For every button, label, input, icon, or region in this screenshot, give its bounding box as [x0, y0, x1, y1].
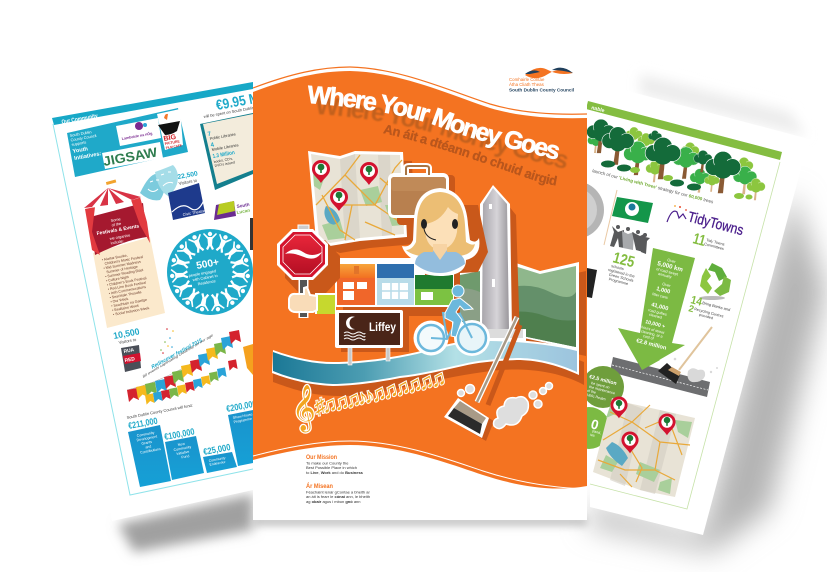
festivals list: • Summer Reading Blast	[105, 268, 144, 279]
bar: 211,000: Grants	[141, 440, 153, 446]
south dublin libraries logo: Lucan	[236, 208, 251, 215]
bar: 25,000: €25,000	[202, 442, 231, 457]
callout: 2.5 million: €2.5 million	[588, 374, 617, 387]
logo: Big Picture cafe	[157, 109, 183, 150]
circle: 500+ people engaged: with Cabinet in	[192, 273, 218, 282]
text: our mission	[306, 454, 364, 475]
icon: group of people	[610, 225, 650, 254]
circle: 500+ people engaged: people engaged	[188, 268, 216, 278]
logo: TidyTowns: TidyTowns	[686, 209, 745, 239]
road	[610, 357, 710, 397]
festivals list: • Seachtain Thusaila	[109, 290, 142, 300]
black tile	[587, 268, 597, 298]
panel: center cover page	[252, 66, 587, 520]
icon: dark tile	[250, 218, 253, 250]
bar: 211,000: Contributions	[140, 447, 161, 455]
bar: 100,000: Initiative	[176, 450, 190, 456]
south dublin libraries logo	[214, 201, 251, 220]
logo: Lamboirle: Lamboirle na nÓg	[121, 131, 153, 141]
stat: 125 schools	[605, 249, 637, 287]
text: ar misean: ag obair agus i mbun gnó ann	[306, 499, 360, 504]
big top tent: festivals and events: include:	[110, 238, 124, 245]
arrow: street cleaning stats: 1,000	[655, 286, 671, 296]
festivals list: Summer of Heritage	[106, 265, 138, 274]
circle: 500+ people engaged	[167, 229, 253, 315]
arrow: street cleaning stats: 41,000	[650, 302, 669, 312]
illustration: dust clouds	[458, 382, 552, 429]
bar: 211,000: Community	[136, 431, 155, 438]
forest of trees	[587, 119, 765, 200]
page shadows	[118, 74, 826, 552]
stat: bring banks: Bring Banks and	[702, 300, 731, 312]
bar: 211,000	[127, 416, 171, 487]
logo: South Dublin County Council: Comhairle Contae	[509, 77, 545, 82]
logo: South Dublin County Council: Átha Cliath Theas	[509, 82, 545, 87]
callout: green circle: ies	[590, 433, 595, 438]
illustration: music notes: ♯♫♫♫♪♪♫♫♫♫♫♫	[314, 371, 445, 417]
panel: left page "Our Community"	[27, 72, 264, 521]
bar: 100,000: New	[177, 442, 186, 447]
stat: 125 schools: Programme	[608, 277, 629, 286]
festivals list: • Bealtaine Week	[112, 304, 139, 312]
festivals list: • Our Week	[110, 297, 129, 304]
confetti	[160, 328, 174, 354]
arrow: street cleaning stats: Over	[662, 281, 672, 288]
youth initiatives panel	[67, 108, 188, 177]
stat: bring banks: provided	[699, 313, 713, 320]
Rua Red stat: 10,500	[112, 326, 140, 341]
funding intro: South Dublin County Council will fund:	[126, 403, 193, 420]
festival heading: Rediscover festival 2015	[151, 338, 203, 371]
stat: 125 schools: registered in the	[608, 268, 635, 279]
youth initiatives panel: County Council	[70, 133, 97, 142]
seal	[546, 181, 604, 239]
civic theatre stat: Civic Theatre	[182, 208, 205, 217]
arrow: street cleaning stats: cost of	[643, 334, 655, 341]
circle: 500+ people engaged: Residence	[197, 278, 216, 286]
strategy text: launch of our 'Living with Trees' strategy for our 60,000 trees	[592, 168, 715, 205]
bushes	[601, 160, 752, 200]
logo: Big Picture cafe: FILM CAFE	[165, 143, 182, 150]
text: ar misean: Féachaint lenár gContae a bheith ar	[306, 490, 370, 494]
header bar: Our Community	[61, 113, 99, 126]
festivals list: Children's Music Festival	[104, 255, 144, 266]
stat: 11 committees: Committees	[704, 242, 724, 251]
logo: JIGSAW: JIGSAW	[102, 144, 159, 169]
youth initiatives panel: South Dublin	[69, 129, 92, 138]
callout: 2.5 million: Public Realm	[584, 392, 606, 402]
bar chart: funding	[127, 398, 257, 487]
stat: 125 schools: Green Schools	[608, 273, 634, 283]
amount: 9.95 million: will be spent on South Dublin	[203, 105, 254, 119]
festivals list: • Children's Book Festival	[107, 276, 147, 287]
arrow: street cleaning stats: cleaning, at a	[641, 329, 664, 339]
logo: TidyTowns	[667, 205, 745, 239]
arrow: street cleaning stats: Over	[667, 257, 677, 264]
icon: recycling	[699, 263, 731, 300]
header bar: nable	[590, 105, 605, 114]
bar: 25,000: Endeavour	[209, 460, 227, 467]
bar: 100,000: Fund	[181, 454, 190, 459]
bar: 100,000: Community	[173, 445, 192, 452]
stat: 11 committees: Tidy Towns	[706, 238, 725, 247]
illustration: music notes	[292, 371, 445, 434]
stat: bring banks	[687, 294, 731, 323]
orange shape	[243, 344, 253, 375]
arrow: street cleaning stats: litter cans	[652, 292, 668, 300]
callout: 2.5 million: of the	[587, 389, 596, 395]
logo: Big Picture cafe: PICTURE	[164, 139, 181, 146]
bar: 25,000	[202, 442, 237, 473]
arrow tip over road	[630, 348, 660, 370]
civic theatre stat	[168, 170, 205, 220]
arrow: street cleaning stats: 10,000 +	[644, 319, 666, 330]
title: Where Your Money Goes	[308, 85, 560, 160]
civic theatre stat: Visitors to	[178, 178, 198, 186]
tent roof	[83, 188, 142, 208]
amount: 9.95 million	[203, 90, 264, 119]
illustration: Liffey sign	[335, 310, 409, 365]
bar: 100,000: €100,000	[163, 426, 195, 442]
arrow: street cleaning stats: annually	[658, 272, 672, 279]
callout: 2.5 million	[582, 366, 624, 408]
broom and dust	[658, 327, 718, 384]
logo: South Dublin County Council: South Dublin County Council	[509, 88, 574, 92]
book: libraries: Mobile Libraries	[211, 142, 239, 152]
stat: bring banks: 2	[687, 303, 695, 314]
stat: bring banks: 14	[689, 294, 704, 309]
arrow: street cleaning stats: cleaned	[649, 313, 662, 320]
text: our mission: to Live, Work and do Business	[306, 470, 363, 475]
stat: 125 schools: 125	[611, 249, 637, 271]
bar: 200,000	[225, 398, 257, 466]
arrow: street cleaning stats	[618, 248, 695, 370]
text: ar misean: an áit is fearr le cónaí ann, le bheith	[306, 494, 370, 499]
illustration: woman with headset	[402, 188, 488, 276]
illustration: music notes: 𝄞	[292, 385, 316, 433]
illustration: river	[272, 339, 584, 396]
bar: 200,000: Show House	[232, 412, 253, 420]
bar: 100,000	[163, 426, 204, 480]
Rua Red stat	[112, 326, 141, 372]
big top tent: festivals and events	[83, 179, 165, 328]
text: our mission: Best Possible Place in which	[306, 465, 357, 470]
festivals list: • Red Line Book Festival	[107, 281, 146, 291]
illustration: map with pins	[308, 151, 415, 253]
amount: 9.95 million: €9.95 Mi	[215, 90, 264, 114]
civic theatre stat: 22,500	[177, 170, 199, 181]
festivals list: • Culture Night	[106, 275, 129, 283]
green house	[415, 275, 453, 305]
cream list panel	[93, 237, 165, 328]
map with pins	[593, 396, 695, 497]
icon: theatre masks	[140, 165, 178, 200]
festivals list: • Seachtain na Gaeilge	[111, 298, 147, 308]
illustration: obelisk	[474, 185, 526, 341]
background trees	[588, 127, 765, 200]
youth initiatives panel: Initiatives:	[74, 151, 102, 162]
festivals list: • Alastar Bourke,	[101, 253, 128, 262]
title shadow: Where Your Money Goes	[316, 96, 568, 168]
text: ar misean	[306, 481, 370, 504]
youth initiatives panel: Youth	[72, 146, 89, 155]
big top tent: festivals and events: of the	[111, 221, 122, 227]
book: libraries: Public Libraries	[209, 131, 236, 141]
bar: 211,000: Development	[136, 435, 158, 442]
arrow: street cleaning stats: of road swept	[656, 267, 678, 277]
green flag	[604, 190, 653, 245]
Rua Red stat: RUA	[123, 347, 135, 355]
festivals list: • Irish Commemorations	[108, 285, 147, 296]
side curtains	[85, 197, 150, 255]
stat: 11 committees	[691, 230, 726, 251]
arrow: street cleaning stats: 5,000 km	[656, 260, 684, 274]
irish subtitle: An áit a dtéann do chuid airgid	[383, 125, 558, 186]
bar: 211,000: €211,000	[127, 416, 158, 431]
bunting	[127, 330, 241, 405]
hand and sleeve	[289, 287, 336, 314]
illustration: houses	[335, 258, 460, 316]
book: libraries: 7	[207, 130, 212, 138]
orange house	[337, 264, 375, 305]
callout: green circle: 0	[589, 416, 600, 433]
text: our mission: To make our County the	[306, 460, 349, 466]
header bar	[586, 101, 782, 160]
illustration: stop sign held by hand	[277, 225, 340, 318]
callout: green circle: (land,	[592, 429, 602, 435]
callout: 2.5 million: be spent on	[591, 381, 610, 390]
red stage curtain	[90, 203, 147, 255]
text: ar misean: Ár Misean	[306, 481, 333, 490]
illustration: broom	[444, 317, 520, 441]
orange wave background	[253, 71, 587, 489]
callout: 2.5 million: the maintenance	[589, 385, 616, 395]
festival heading: 80 events captivating creativity on our age	[142, 332, 214, 379]
south dublin libraries logo: South	[236, 202, 250, 209]
illustration: Liffey sign: Liffey	[369, 320, 396, 334]
big top tent: festivals and events: we organise	[109, 232, 131, 241]
bar: 200,000: Programme	[233, 417, 252, 424]
stat: bring banks: Recycling Centres	[694, 307, 724, 319]
book: libraries	[200, 113, 253, 190]
circle: 500+ people engaged: 500+	[195, 257, 220, 272]
page border	[590, 162, 780, 509]
illustration: briefcase	[388, 166, 455, 225]
bar: 211,000: and	[145, 444, 152, 449]
logo: South Dublin County Council	[509, 68, 574, 92]
book: libraries: DVD's issued	[214, 160, 235, 168]
header bar	[52, 82, 253, 126]
festivals list: • Mid-Summer Madness	[103, 260, 141, 270]
bar: 200,000: €200,000	[225, 398, 257, 414]
big top tent: festivals and events: Festivals & Events	[96, 223, 140, 237]
book: libraries: 1.3 Million	[212, 150, 236, 160]
panel: right page "Sustainable"	[546, 81, 809, 535]
arrow: street cleaning stats: hours of street	[641, 325, 665, 335]
Rua Red stat: RED	[124, 356, 136, 364]
illustration: landscape hills	[452, 261, 586, 356]
arrow: street cleaning stats: €2.8 million	[635, 338, 667, 352]
book: libraries: books, CD's,	[213, 157, 233, 164]
book: libraries: 4	[210, 141, 215, 149]
stat: 11 committees: 11	[691, 230, 708, 250]
illustration: cyclist	[414, 285, 490, 356]
page border	[53, 124, 253, 495]
festivals list: • Social Inclusion Week	[113, 306, 150, 317]
center page shadow	[253, 516, 587, 526]
arrow: street cleaning stats: road gullies	[648, 308, 667, 317]
logo: Big Picture cafe: BIG	[163, 133, 177, 143]
callout: green circle	[568, 407, 610, 449]
youth initiatives panel: supports	[71, 139, 87, 147]
Rua Red stat: Visitors to	[118, 337, 137, 345]
big top tent: festivals and events: Some	[110, 216, 121, 223]
bar: 25,000: Community	[208, 456, 226, 463]
text: our mission: Our Mission	[306, 454, 337, 461]
stat: 125 schools: schools	[611, 264, 624, 271]
blue house	[377, 264, 414, 305]
